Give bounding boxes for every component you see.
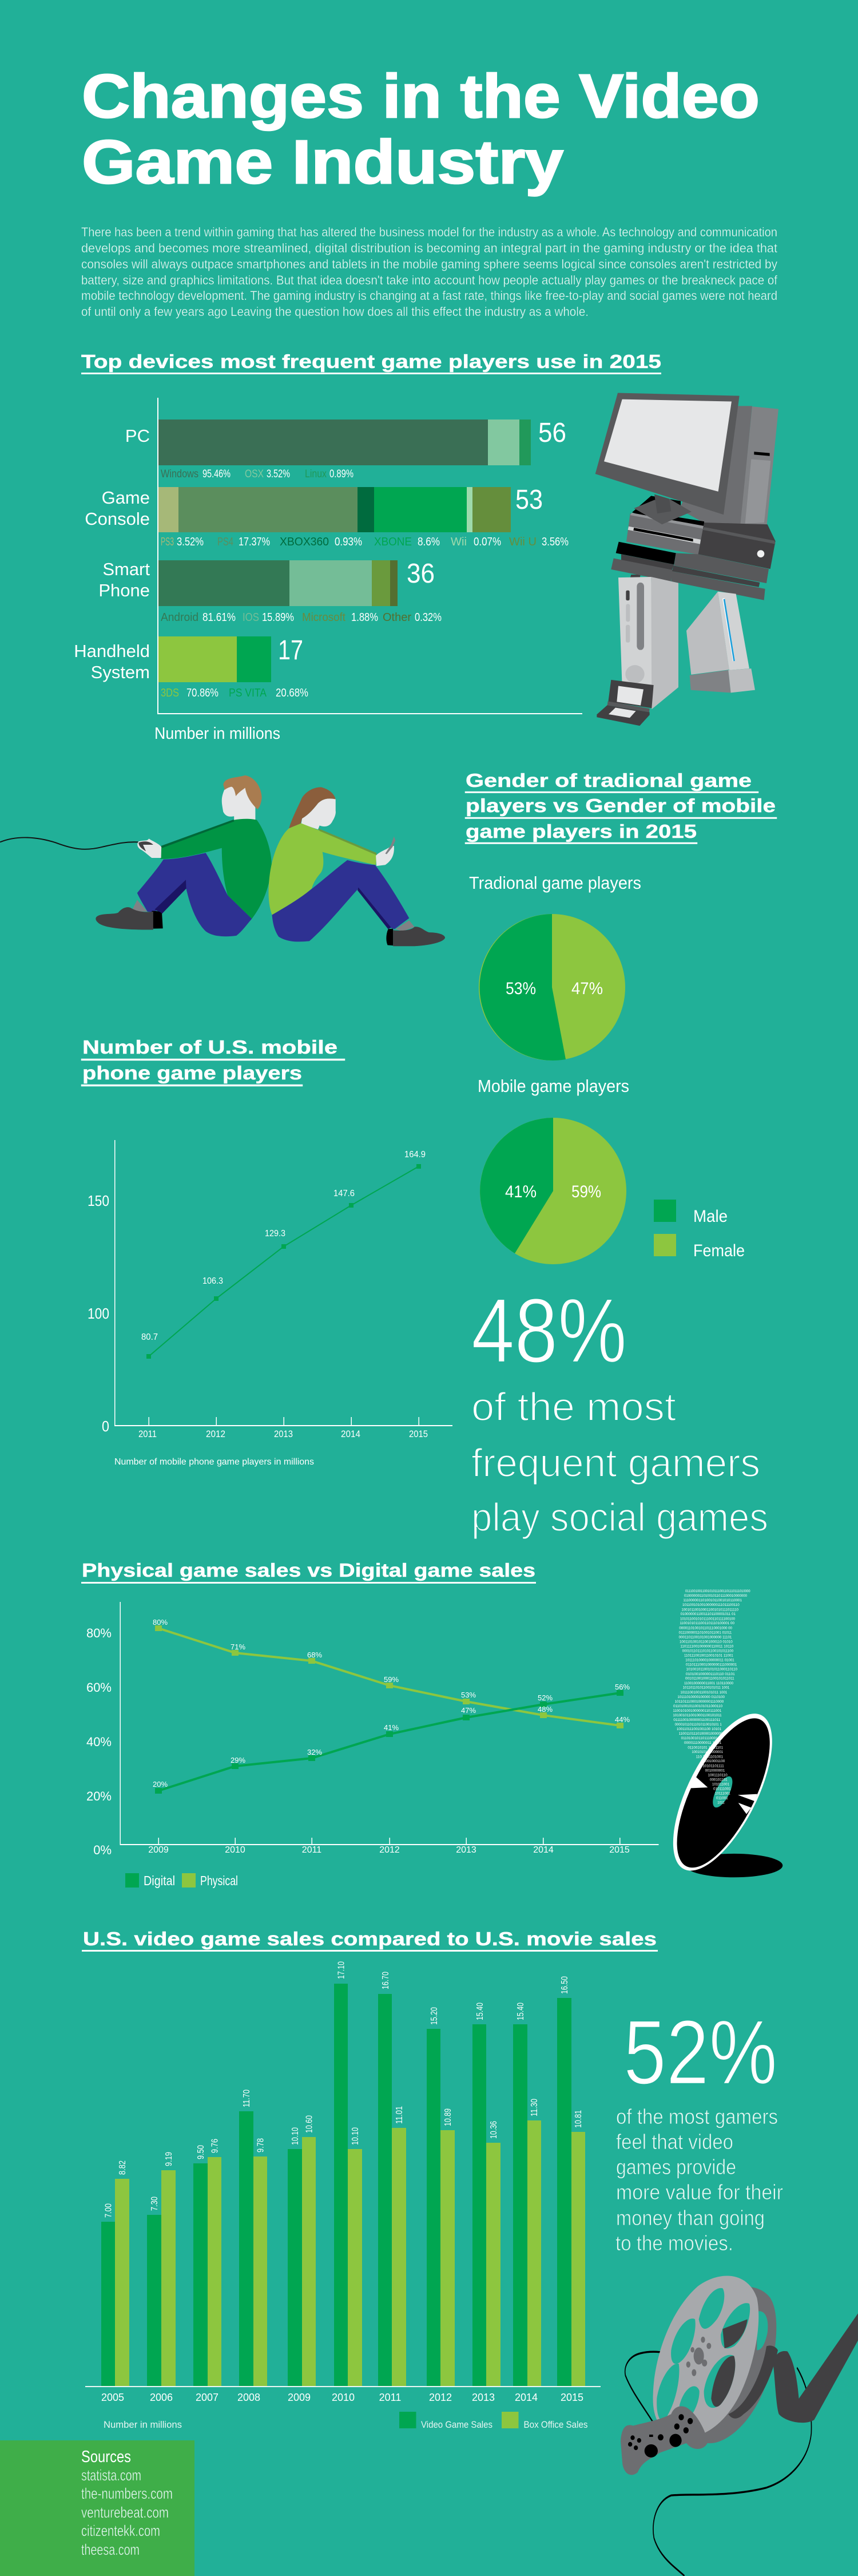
year labels: 2006: [150, 2392, 173, 2403]
row: PC: [125, 418, 566, 480]
video game value labels: [104, 1961, 570, 2218]
callout: 48% social games: play social games: [471, 1495, 768, 1540]
year labels: 2010: [332, 2392, 355, 2403]
box office value labels: 10.81: [574, 2110, 583, 2128]
row: smart phone: 1.88%: [351, 611, 378, 624]
binary stream text: 010111001: [713, 1787, 731, 1791]
binary stream text: 011001: [716, 1796, 728, 1801]
line chart: physical vs digital: 40%: [86, 1735, 112, 1749]
title: Game Industry: [82, 127, 563, 196]
illustration: two gamers sitting back to back: [0, 775, 445, 946]
year labels: 2008: [237, 2392, 260, 2403]
binary stream text: 11011100100110010101 11001: [684, 1653, 733, 1658]
box office value labels: 10.10: [351, 2127, 360, 2145]
year labels: [101, 2392, 583, 2403]
row: handheld system: 3DS: [161, 687, 179, 699]
axis caption: Number in millions: [154, 725, 280, 743]
callout: 52% value for money: feel that video: [616, 2130, 733, 2154]
heading: mobile players: phone game players: [82, 1062, 302, 1083]
controller cable: [0, 837, 138, 849]
row: game console: 17.37%: [239, 536, 270, 548]
video game value labels: 10.10: [291, 2127, 300, 2145]
binary stream text: 110 1001101001: [696, 1755, 724, 1759]
binary stream text: 10100101100101011000110110: [686, 1667, 738, 1672]
data line: [149, 1166, 419, 1356]
heading: gender: players vs Gender of mobile: [466, 795, 776, 816]
binary stream text: 1100100000011001 110110000: [684, 1681, 734, 1685]
binary stream text: 10111001001100101011 1001: [680, 1691, 728, 1695]
line chart: physical vs digital: 71%: [231, 1643, 245, 1651]
back reel: [696, 2287, 776, 2443]
panel: sources: statista.com: [81, 2467, 141, 2484]
video game sales bars: [101, 1984, 571, 2387]
callout: 52% value for money: money than going: [616, 2206, 765, 2230]
panel: sources: Sources: [81, 2448, 131, 2466]
intro text block: There has been a trend within gaming that has altered the business model for the industry as a whole. As technology and communication: [81, 225, 777, 239]
box office value labels: 9.76: [210, 2139, 220, 2153]
callout: 48% social games: of the most: [471, 1384, 676, 1429]
line chart: mobile phone game players: 106.3: [202, 1276, 223, 1286]
line chart: physical vs digital: 59%: [384, 1675, 399, 1684]
line chart: physical vs digital: 2010: [225, 1845, 245, 1855]
year labels: 2005: [101, 2392, 124, 2403]
row: game console: XBOX360: [280, 536, 329, 548]
row: smart phone: Smart: [102, 559, 150, 579]
callout: 48% social games: [471, 1279, 768, 1540]
box office value labels: 10.60: [304, 2115, 315, 2133]
binary stream text: 1101111001000000110011 10110: [680, 1644, 734, 1649]
line chart: physical vs digital: 2014: [533, 1845, 554, 1855]
binary stream text: 0010110010001100101011011: [685, 1676, 734, 1681]
title: [82, 61, 760, 196]
box office value labels: 11.30: [530, 2099, 539, 2116]
intro text block: of until only a few years ago Leaving the question how does all this effect the industry as a whole.: [81, 304, 589, 319]
illustration: stacked consoles and PC: [595, 393, 778, 726]
box office sales bars: [115, 2120, 585, 2387]
binary stream text: [673, 1589, 750, 1805]
video game value labels: 15.20: [430, 2007, 439, 2025]
caption: Number in millions: [104, 2419, 182, 2430]
binary stream text: 111000001101001011001010110001: [683, 1598, 742, 1602]
pie chart: mobile game players: 41%: [505, 1182, 537, 1201]
box office value labels: 9.78: [256, 2138, 265, 2152]
row: handheld system: System: [91, 662, 150, 682]
row: smart phone: Other: [383, 611, 411, 624]
line chart: physical vs digital: 80%: [86, 1626, 112, 1640]
row: handheld system: 20.68%: [276, 687, 308, 699]
line chart: mobile phone game players: [88, 1140, 452, 1467]
controller wire: [625, 2352, 812, 2576]
video game value labels: 16.50: [560, 1976, 570, 1994]
video game value labels: 9.50: [196, 2145, 206, 2159]
row: game console: Game: [102, 488, 150, 508]
video game value labels: 16.70: [381, 1972, 391, 1989]
row: smart phone: 36: [407, 559, 435, 589]
row: game console: PS3: [161, 536, 174, 548]
callout: 52% value for money: of the most gamers: [616, 2105, 778, 2128]
year labels: 2011: [379, 2392, 401, 2403]
digital sales line: [155, 1690, 623, 1794]
line chart: mobile phone game players: 150: [88, 1192, 109, 1209]
line chart: physical vs digital: 2012: [379, 1845, 400, 1855]
heading: physical vs digital: Physical game sales vs Digital game sales: [82, 1560, 535, 1581]
binary stream text: 000101101110101100101011100: [682, 1649, 734, 1653]
pie chart: traditional game players: [469, 873, 641, 1061]
intro text block: consoles will always outpace smartphones and tablets in the mobile gaming sphere seems logical since consoles aren't restricted by: [81, 257, 777, 271]
row: smart phone: [98, 559, 442, 624]
line chart: physical vs digital: 47%: [461, 1706, 476, 1715]
line chart: physical vs digital: 20%: [86, 1789, 112, 1803]
binary stream text: 0101001000001110110 01101: [686, 1672, 735, 1676]
binary stream text: 10110110101100101011 1001: [683, 1686, 730, 1690]
binary stream text: 1001101001011001000110 01010: [680, 1640, 733, 1644]
line chart: mobile phone game players: 164.9: [404, 1150, 426, 1160]
line chart: physical vs digital: 44%: [615, 1715, 630, 1724]
line chart: mobile phone game players: 80.7: [141, 1332, 158, 1342]
row: handheld system: 70.86%: [186, 687, 219, 699]
line chart: physical vs digital: 29%: [231, 1756, 245, 1764]
intro text block: battery, size and graphics limitations. But that idea doesn't take into account how people actually play games or the breakneck pace of: [81, 273, 778, 287]
row: PC: OSX: [245, 468, 264, 480]
line chart: mobile phone game players: 100: [88, 1305, 109, 1322]
binary stream text: 10101100101011100110111100100: [680, 1617, 736, 1621]
line chart: mobile phone game players: 147.6: [333, 1189, 355, 1198]
row: game console: 53: [515, 485, 543, 515]
binary stream text: 01000000110011101100001011 01: [681, 1612, 736, 1616]
binary stream text: 11001101110100001000000: [679, 1732, 723, 1736]
year labels: 2013: [472, 2392, 495, 2403]
binary stream text: 11001010111001101110100001 00: [680, 1621, 735, 1625]
panel: sources: venturebeat.com: [81, 2504, 169, 2521]
row: game console: 0.93%: [335, 536, 362, 548]
binary stream text: 10101101111: [702, 1764, 724, 1768]
row: PC: 56: [538, 418, 566, 448]
disc shadow: [685, 1854, 782, 1877]
binary stream text: 00001110000011 1 001: [684, 1741, 722, 1745]
binary stream text: 0110010101 1 001101: [688, 1746, 724, 1750]
line chart: mobile phone game players: 2012: [206, 1429, 225, 1439]
video game value labels: 15.40: [475, 2003, 485, 2020]
heading: top devices: Top devices most frequent game players use in 2015: [81, 351, 661, 372]
year labels: 2012: [429, 2392, 452, 2403]
pie chart: mobile game players: [478, 1076, 629, 1264]
callout: 52% value for money: more value for their: [616, 2181, 783, 2204]
row: game console: 0.07%: [474, 536, 501, 548]
pie legend: [654, 1200, 745, 1260]
callout: 48% social games: frequent gamers: [471, 1441, 760, 1485]
box office value labels: 8.82: [118, 2160, 128, 2175]
binary stream text: 1011011100010000001110000: [675, 1700, 724, 1704]
pie chart: traditional game players: 53%: [506, 979, 536, 998]
callout: 48% social games: 48%: [471, 1279, 627, 1382]
pie chart: mobile game players: Mobile game players: [478, 1076, 629, 1096]
heading: mobile players: Number of U.S. mobile: [82, 1036, 337, 1058]
binary stream text: 0111000001101001011001 01011: [679, 1631, 732, 1635]
video game value labels: 15.40: [516, 2003, 526, 2020]
line chart: physical vs digital: 20%: [153, 1780, 168, 1788]
film roll: [728, 2345, 778, 2419]
binary stream text: 0110100101100101011000110: [673, 1704, 723, 1708]
panel: sources: theesa.com: [81, 2541, 140, 2558]
row: smart phone: 0.32%: [415, 611, 442, 624]
heading: gender: [465, 770, 777, 844]
line chart: physical vs digital: 2011: [302, 1845, 321, 1855]
legend: Physical: [200, 1873, 238, 1888]
front reel: [653, 2276, 758, 2437]
line chart: physical vs digital: 56%: [615, 1683, 630, 1691]
line chart: physical vs digital: 32%: [307, 1748, 322, 1756]
heading: gender: Gender of tradional game: [466, 770, 752, 791]
legend: [399, 2412, 588, 2430]
row: smart phone: Android: [161, 611, 198, 624]
box office value labels: [118, 2099, 583, 2175]
row: PC: Linux: [305, 468, 327, 480]
line chart: mobile phone game players: 129.3: [265, 1229, 285, 1238]
title: Changes in the Video: [82, 61, 760, 130]
line chart: mobile phone game players: 2014: [341, 1429, 360, 1439]
row: PC: Windows: [161, 468, 198, 480]
binary stream text: 0110100101101110001 00: [681, 1736, 723, 1740]
panel: sources: citizentekk.com: [81, 2522, 160, 2539]
pie chart: mobile game players: 59%: [571, 1182, 601, 1201]
line chart: physical vs digital: [86, 1602, 659, 1888]
row: PC: 95.46%: [202, 468, 231, 480]
stacked bar chart: top devices: [74, 398, 582, 743]
binary stream text: 1001110110: [708, 1773, 728, 1778]
line chart: physical vs digital: 48%: [538, 1705, 553, 1714]
binary stream text: 101100101001000000111011100110: [682, 1603, 740, 1607]
row: game console: Wii U: [509, 536, 537, 548]
video game value labels: 7.30: [150, 2197, 160, 2211]
row: game console: 3.52%: [177, 536, 204, 548]
panel: sources: the-numbers.com: [81, 2485, 173, 2502]
binary stream text: 01101110001000000111000001: [686, 1663, 737, 1667]
game controller: [621, 2406, 708, 2475]
row: handheld system: 17: [278, 635, 303, 666]
row: game console: Console: [85, 509, 150, 529]
line chart: physical vs digital: 0%: [93, 1843, 112, 1857]
binary stream text: 011110010000001100111011: [673, 1718, 721, 1722]
row: PC: PC: [125, 426, 150, 446]
row: game console: [85, 485, 569, 548]
binary stream text: 10010101 10000001: [692, 1750, 724, 1754]
row: game console: PS4: [217, 536, 233, 548]
heading: mobile players: [81, 1036, 345, 1086]
binary stream text: 10111010000100000 0110100: [677, 1695, 725, 1699]
pie chart: traditional game players: 47%: [571, 979, 603, 998]
callout: 52% value for money: [615, 2001, 783, 2255]
line chart: mobile phone game players: 2015: [409, 1429, 428, 1439]
video game value labels: 17.10: [336, 1961, 347, 1979]
binary stream text: 10111001: [715, 1791, 730, 1796]
intro text block: [81, 225, 778, 319]
pie legend: Female: [693, 1241, 745, 1260]
binary stream text: 000101101: [710, 1778, 728, 1782]
line chart: physical vs digital: 80%: [153, 1618, 168, 1627]
year labels: 2009: [288, 2392, 311, 2403]
line chart: mobile phone game players: 2013: [274, 1429, 293, 1439]
binary stream text: 1100101001000000110111001: [673, 1709, 722, 1713]
legend: [125, 1873, 238, 1888]
line chart: physical vs digital: 52%: [538, 1693, 553, 1702]
box office value labels: 10.89: [443, 2108, 453, 2126]
row: PC: 3.52%: [267, 468, 290, 480]
binary stream text: 1010010110010001100101011: [673, 1714, 722, 1718]
binary stream text: 01110010011001010111001101110111010000: [685, 1589, 750, 1593]
binary stream text: 10111010000100000011 01001: [685, 1658, 734, 1663]
line chart: physical vs digital: 2015: [609, 1845, 630, 1855]
row: handheld system: PS VITA: [229, 687, 267, 699]
binary stream text: 000010110111010110010101 1: [675, 1723, 722, 1727]
row: game console: XBONE: [374, 536, 412, 548]
row: smart phone: Phone: [98, 580, 150, 600]
row: smart phone: 15.89%: [262, 611, 294, 624]
intro text block: develops and becomes more streamlined, digital distribution is becoming an integral part in the gaming industry or the idea that: [81, 241, 777, 255]
video game value labels: 11.70: [242, 2090, 252, 2107]
row: game console: Wii: [451, 536, 467, 548]
box office value labels: 9.19: [164, 2152, 174, 2166]
binary stream text: 110010001100: [702, 1759, 725, 1763]
row: PC: 0.89%: [329, 468, 353, 480]
illustration: compact disc with binary stream: [653, 1589, 792, 1886]
legend: Video Game Sales: [421, 2419, 492, 2430]
line chart: physical vs digital: 41%: [384, 1723, 399, 1732]
callout: 52% value for money: to the movies.: [615, 2231, 733, 2255]
row: smart phone: Microsoft: [302, 611, 345, 624]
woman figure: [269, 787, 445, 946]
panel: sources: [0, 2440, 194, 2576]
film strip: [773, 2313, 858, 2423]
binary stream text: 100110111001001100 10101: [677, 1727, 722, 1731]
intro text block: mobile technology development. The gaming industry is changing at a fast rate, things like free-to-play and social games were not heard: [81, 288, 777, 303]
binary stream text: 1011: [717, 1801, 725, 1805]
box office value labels: 10.36: [489, 2121, 499, 2139]
year labels: 2007: [196, 2392, 219, 2403]
line chart: mobile phone game players: 2011: [138, 1429, 157, 1439]
binary stream text: 100101100100011001010111011110: [681, 1608, 739, 1612]
line chart: physical vs digital: 68%: [307, 1651, 322, 1659]
binary stream text: 010000001101001011011100010000000: [684, 1594, 748, 1598]
row: handheld system: [74, 635, 308, 699]
physical sales line: [155, 1625, 623, 1728]
grouped bar chart: video game vs box office sales: [85, 1961, 601, 2430]
binary stream text: 0000110100101101110001000 00: [679, 1626, 733, 1630]
legend: Digital: [144, 1873, 175, 1888]
disc: [653, 1698, 792, 1886]
callout: 52% value for money: 52%: [623, 2001, 777, 2103]
year labels: 2015: [561, 2392, 583, 2403]
year labels: 2014: [515, 2392, 538, 2403]
binary stream text: 0010000001: [705, 1768, 725, 1772]
callout: 52% value for money: games provide: [616, 2155, 736, 2179]
box office value labels: 11.01: [395, 2106, 404, 2124]
binary stream text: 0001101100101001000000 11101: [679, 1635, 732, 1640]
legend: Box Office Sales: [524, 2419, 588, 2430]
heading: gender: game players in 2015: [466, 821, 697, 842]
row: game console: 8.6%: [418, 536, 440, 548]
man figure: [96, 775, 272, 936]
heading: game vs movie sales: U.S. video game sales compared to U.S. movie sales: [83, 1928, 657, 1949]
illustration: film reel and game controller: [621, 2276, 858, 2576]
line chart: mobile phone game players: 0: [102, 1418, 109, 1435]
row: smart phone: 81.61%: [202, 611, 236, 624]
line chart: physical vs digital: 60%: [86, 1680, 112, 1695]
line chart: physical vs digital: 2013: [456, 1845, 476, 1855]
row: handheld system: Handheld: [74, 641, 150, 661]
pie chart: traditional game players: Tradional game players: [469, 873, 641, 893]
row: smart phone: IOS: [243, 611, 259, 624]
line chart: physical vs digital: 2009: [148, 1845, 169, 1855]
line chart: mobile phone game players: Number of mobile phone game players in millions: [114, 1457, 314, 1467]
row: game console: 3.56%: [542, 536, 569, 548]
pie legend: Male: [693, 1207, 728, 1226]
video game value labels: 7.00: [104, 2203, 113, 2218]
line chart: physical vs digital: 53%: [461, 1691, 476, 1699]
binary stream text: 101011001: [712, 1782, 730, 1787]
